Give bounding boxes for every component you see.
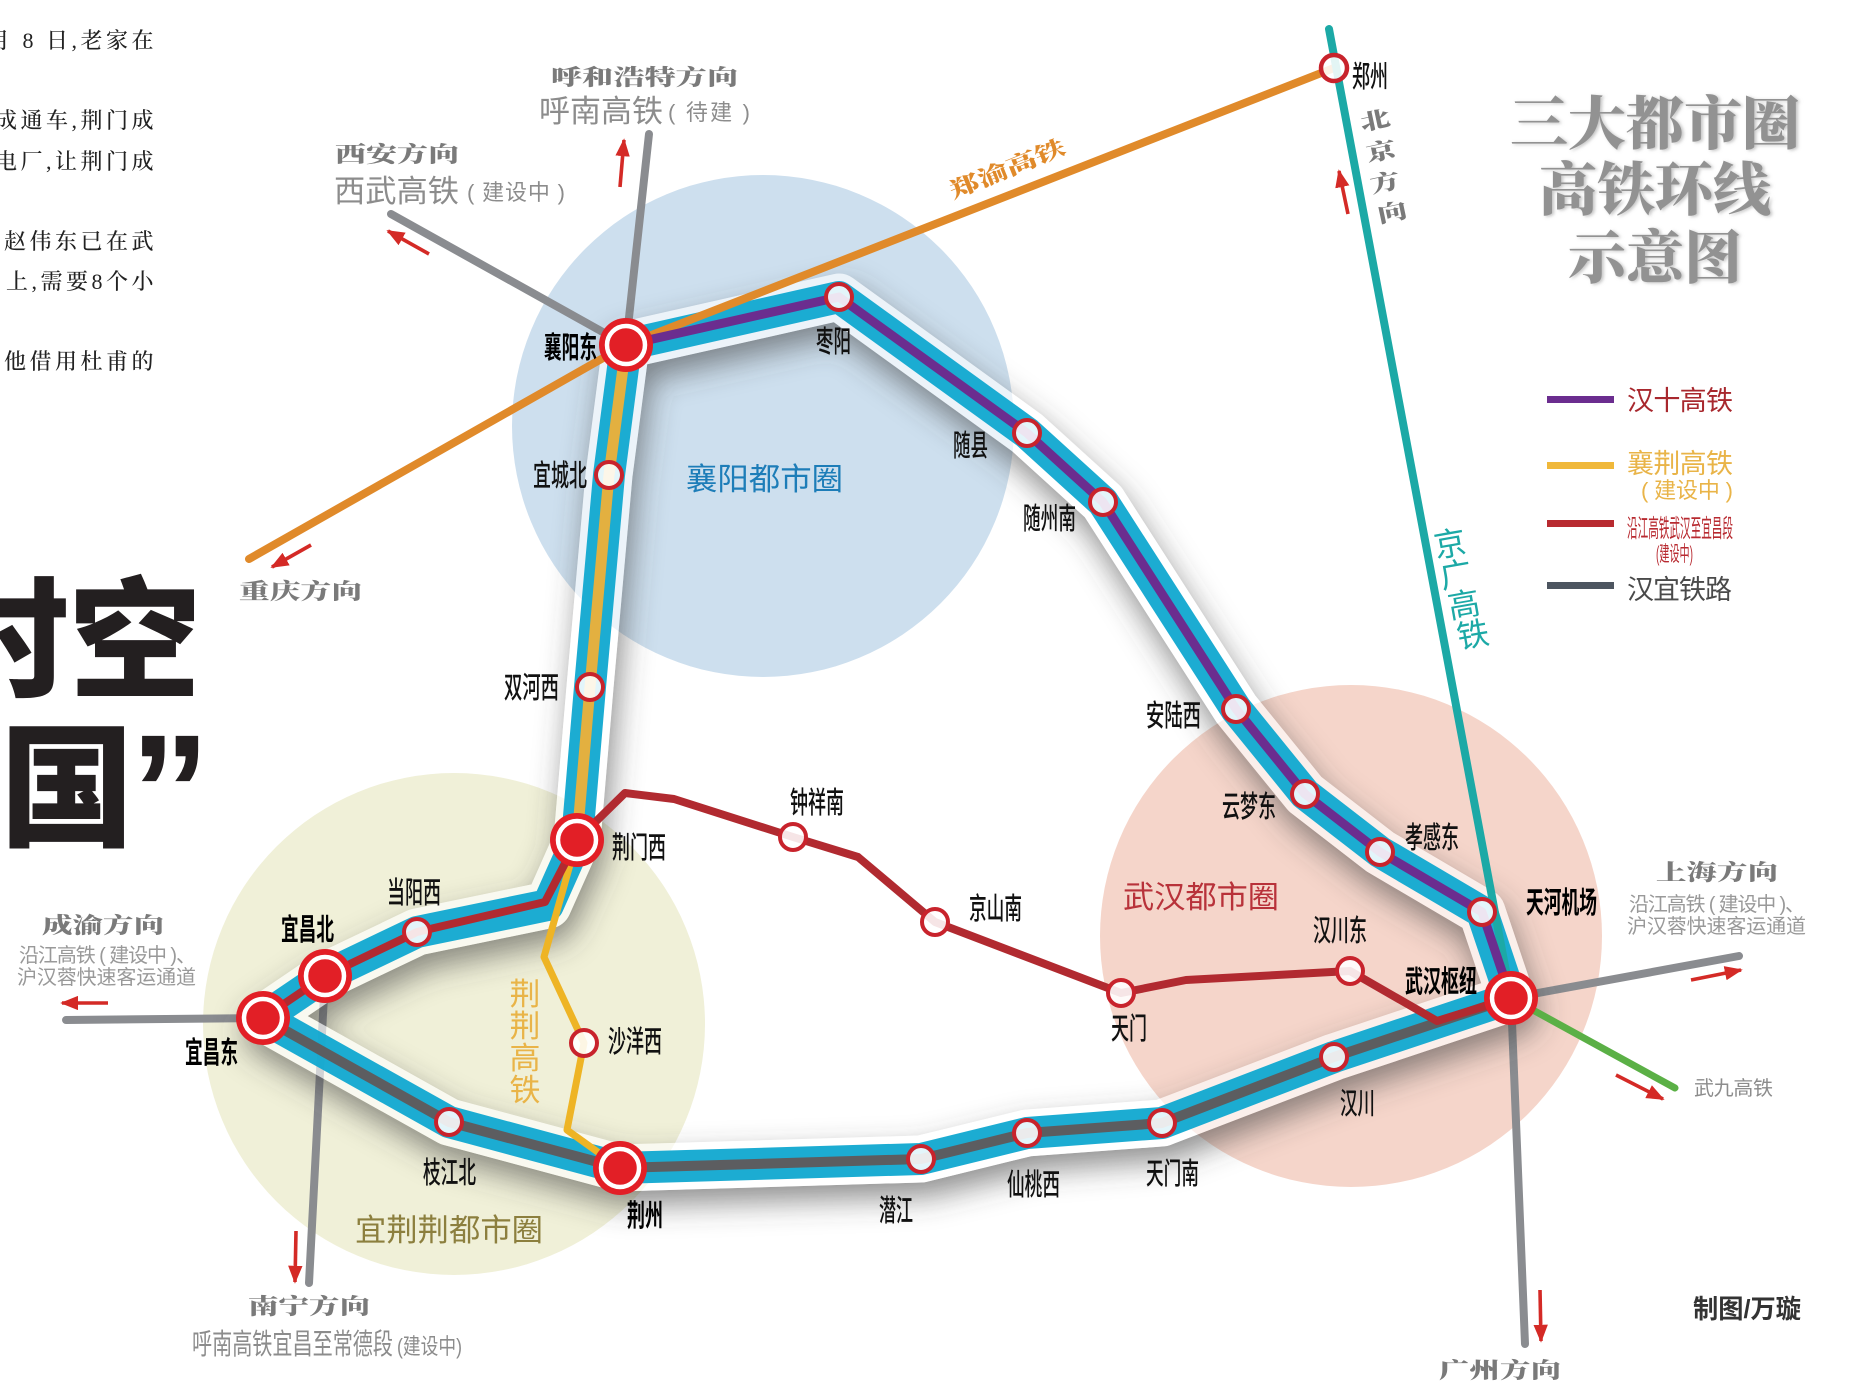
legend: 沿江高铁武汉至宜昌段 — [1547, 515, 1733, 566]
direction arrows — [62, 140, 1741, 1341]
ring route halo — [263, 297, 1511, 1168]
station: 枝江北 — [423, 1109, 476, 1190]
legend: 沿江高铁武汉至宜昌段: (建设中) — [1656, 543, 1693, 566]
station: 潜江 — [879, 1146, 934, 1228]
label: 京广高铁: 高 — [1445, 584, 1483, 626]
label: 呼和浩特方向: 呼和浩特方向 — [551, 65, 738, 90]
outgoing gray lines — [66, 134, 1739, 1344]
station: 安陆西: 安陆西 — [1146, 700, 1201, 733]
major station: 武汉枢纽 — [1405, 966, 1538, 1025]
station: 随州南 — [1023, 489, 1116, 536]
label: 武九高铁: 武九高铁 — [1694, 1077, 1773, 1100]
station: 汉川 — [1321, 1044, 1375, 1121]
station: 汉川: 汉川 — [1340, 1088, 1375, 1121]
label: 西武高铁（建设中） — [334, 174, 565, 209]
label: 北京方向: 方 — [1368, 167, 1402, 198]
label: 宜荆荆都市圈: 宜荆荆都市圈 — [355, 1213, 543, 1248]
label: 成渝方向: 成渝方向 — [42, 913, 164, 938]
station: 天门 — [1108, 980, 1147, 1046]
label: 荆荆高铁 — [510, 977, 540, 1108]
line: 襄荆高铁 — [577, 345, 626, 840]
label: 荆荆高铁: 高 — [510, 1041, 540, 1076]
legend: 襄荆高铁: 襄荆高铁 — [1627, 449, 1733, 479]
label: 沿江高铁 沪汉蓉 (east): 沪汉蓉快速客运通道 — [1627, 915, 1806, 938]
circle: 宜荆荆都市圈 — [203, 773, 705, 1275]
label: 襄阳都市圈: 襄阳都市圈 — [686, 462, 843, 497]
major station: 襄阳东: 襄阳东 — [544, 332, 597, 365]
credit: 制图/万璇 — [1693, 1294, 1801, 1324]
circle: 武汉都市圈 — [1100, 685, 1602, 1187]
station: 仙桃西 — [1007, 1120, 1060, 1202]
station: 钟祥南: 钟祥南 — [790, 787, 844, 820]
station: 当阳西 — [387, 877, 441, 945]
major station: 武汉枢纽: 武汉枢纽 — [1405, 966, 1477, 999]
label: 呼南高铁宜昌至常德段（建设中）: (建设中) — [397, 1334, 462, 1359]
ring route blue band — [263, 297, 1511, 1168]
chart title — [1510, 92, 1800, 291]
station: 潜江: 潜江 — [879, 1195, 913, 1228]
station: 京山南: 京山南 — [969, 893, 1022, 926]
major station: 荆州: 荆州 — [627, 1200, 663, 1233]
major station: 襄阳东 — [544, 318, 653, 372]
body text fragment (cropped article column): 上,需要8个小 — [6, 269, 157, 294]
station: 双河西: 双河西 — [504, 672, 559, 705]
station: 天门: 天门 — [1111, 1013, 1147, 1046]
major station: 宜昌东: 宜昌东 — [185, 1037, 238, 1070]
label: 北京方向: 向 — [1375, 197, 1409, 228]
major station: 荆州 — [593, 1141, 663, 1233]
station: 钟祥南 — [780, 787, 844, 850]
big headline fragment (cropped): 国 — [0, 716, 134, 865]
major station: 宜昌北 — [281, 914, 352, 1003]
chart title: 高铁环线 — [1539, 158, 1771, 223]
label: 重庆方向: 重庆方向 — [239, 579, 362, 604]
label: 沿江高铁 沪汉蓉 (west) — [17, 944, 196, 989]
label: 京广高铁: 广 — [1437, 554, 1475, 596]
label: 西武高铁（建设中）: 西武高铁 — [334, 174, 459, 209]
label: 荆荆高铁: 荆 — [510, 977, 540, 1012]
label: 沿江高铁 沪汉蓉 (west): 沿江高铁 ( 建设中 )、 — [19, 944, 196, 967]
line: 汉十高铁 — [626, 297, 1511, 998]
label: 北京方向: 北 — [1358, 105, 1392, 136]
body text fragment (cropped article column): 赵伟东已在武 — [4, 229, 157, 254]
station: 孝感东 — [1367, 822, 1459, 865]
station: 京山南 — [922, 893, 1022, 935]
label: 荆荆高铁: 荆 — [510, 1009, 540, 1044]
label: 沿江高铁 沪汉蓉 (east): 沿江高铁 ( 建设中 )、 — [1629, 893, 1805, 916]
line: 荆荆高铁 — [544, 840, 620, 1168]
label: 京广高铁 — [1431, 523, 1492, 656]
ring route shadow — [267, 311, 1515, 1182]
legend: 襄荆高铁: ( 建设中 ) — [1641, 478, 1733, 503]
label: 西武高铁（建设中）: ( 建设中 ) — [467, 180, 565, 205]
line: 郑渝高铁 — [249, 68, 1334, 559]
big headline fragment (cropped) — [0, 569, 210, 880]
legend: 汉十高铁 — [1547, 386, 1733, 416]
station: 仙桃西: 仙桃西 — [1007, 1169, 1060, 1202]
station: 随县 — [953, 420, 1040, 463]
station: 孝感东: 孝感东 — [1405, 822, 1459, 855]
legend — [1547, 386, 1733, 605]
legend: 汉宜铁路: 汉宜铁路 — [1627, 575, 1732, 605]
station: 天河机场: 天河机场 — [1526, 887, 1597, 920]
station: 天门南: 天门南 — [1146, 1158, 1199, 1191]
label: 沿江高铁 沪汉蓉 (east) — [1627, 893, 1806, 938]
label: 呼南高铁（待建）: 呼南高铁 — [539, 94, 663, 129]
station: 天河机场 — [1469, 887, 1597, 925]
label: 北京方向: 京 — [1364, 136, 1400, 167]
label: 京广高铁: 铁 — [1454, 614, 1492, 656]
station: 枝江北: 枝江北 — [423, 1157, 476, 1190]
body text fragment (cropped article column) — [0, 28, 157, 374]
station: 随州南: 随州南 — [1023, 503, 1076, 536]
legend: 汉宜铁路 — [1547, 575, 1732, 605]
station: 云梦东: 云梦东 — [1222, 791, 1276, 824]
station: 当阳西: 当阳西 — [387, 877, 441, 910]
station: 沙洋西: 沙洋西 — [608, 1026, 662, 1059]
legend: 汉十高铁: 汉十高铁 — [1627, 386, 1733, 416]
legend: 襄荆高铁 — [1547, 449, 1733, 503]
line: 沿江高铁 — [263, 793, 1511, 1021]
station: 郑州: 郑州 — [1352, 61, 1388, 94]
label: 呼南高铁宜昌至常德段（建设中）: 呼南高铁宜昌至常德段 — [192, 1328, 393, 1361]
circle: 襄阳都市圈 — [512, 175, 1014, 677]
station: 枣阳 — [816, 284, 852, 359]
label: 上海方向: 上海方向 — [1656, 860, 1778, 885]
line: 京广高铁 — [1329, 29, 1511, 998]
label: 北京方向 — [1358, 105, 1409, 228]
label: 西安方向: 西安方向 — [335, 142, 459, 167]
station: 郑州 — [1321, 55, 1388, 94]
label: 沿江高铁 沪汉蓉 (west): 沪汉蓉快速客运通道 — [17, 966, 196, 989]
major station: 宜昌东 — [185, 991, 290, 1070]
big headline fragment (cropped): ” — [130, 701, 210, 880]
chart title: 示意图 — [1568, 225, 1742, 291]
label: 郑渝高铁: 郑渝高铁 — [946, 134, 1069, 204]
station: 宜城北: 宜城北 — [533, 460, 587, 493]
chart title: 三大都市圈 — [1510, 92, 1800, 157]
label: 呼南高铁（待建） — [539, 94, 750, 129]
station: 汉川东: 汉川东 — [1313, 915, 1367, 948]
station: 枣阳: 枣阳 — [816, 326, 851, 359]
line: 汉宜铁路 — [263, 998, 1511, 1168]
label: 荆荆高铁: 铁 — [510, 1073, 540, 1108]
line: 武九高铁 — [1511, 998, 1675, 1088]
label: 京广高铁: 京 — [1431, 523, 1469, 565]
station: 沙洋西 — [571, 1026, 662, 1059]
major station: 宜昌北: 宜昌北 — [281, 914, 334, 947]
station: 天门南 — [1146, 1110, 1199, 1191]
label: 武汉都市圈: 武汉都市圈 — [1123, 880, 1279, 915]
label: 呼南高铁（待建）: ( 待建 ) — [668, 100, 750, 125]
major station: 荆门西: 荆门西 — [612, 832, 666, 865]
label: 广州方向: 广州方向 — [1439, 1358, 1561, 1383]
station: 随县: 随县 — [953, 430, 988, 463]
major station: 荆门西 — [550, 813, 666, 867]
label: 南宁方向: 南宁方向 — [248, 1294, 370, 1319]
station: 汉川东 — [1313, 915, 1367, 984]
